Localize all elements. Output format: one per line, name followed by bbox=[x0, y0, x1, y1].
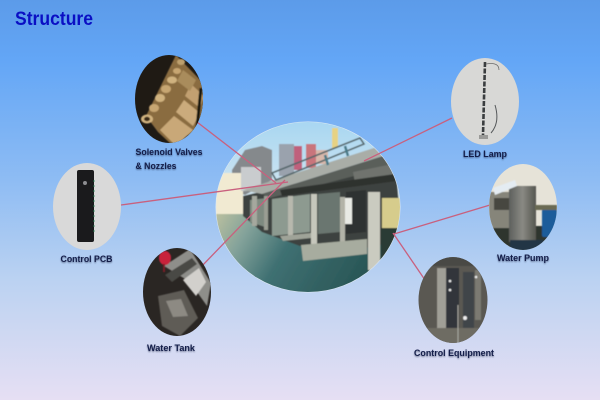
label: solenoid valves: Solenoid Valves bbox=[136, 147, 202, 158]
photo: solenoid valves bbox=[135, 55, 205, 146]
title: Structure bbox=[15, 9, 93, 30]
node: water tank bbox=[143, 248, 211, 354]
label: control PCB: Control PCB bbox=[60, 254, 113, 265]
photo: water pump bbox=[489, 164, 557, 252]
label: control equipment: Control Equipment bbox=[414, 348, 495, 359]
photo: control PCB bbox=[53, 163, 121, 250]
label: nozzles: & Nozzles bbox=[136, 161, 176, 172]
photo: water tank bbox=[143, 248, 211, 336]
label: LED lamp: LED Lamp bbox=[463, 149, 507, 160]
central photo: bridge over river bbox=[216, 122, 400, 292]
node: solenoid valves and nozzles bbox=[135, 55, 205, 172]
node: LED lamp bbox=[451, 58, 519, 160]
node: control equipment bbox=[414, 257, 495, 359]
node: water pump bbox=[489, 164, 557, 264]
photo: control equipment bbox=[418, 257, 489, 344]
connector lines bbox=[121, 118, 490, 280]
label: water tank: Water Tank bbox=[147, 343, 196, 354]
label: water pump: Water Pump bbox=[497, 253, 549, 264]
photo: LED lamp bbox=[451, 58, 519, 145]
node: control PCB bbox=[53, 163, 121, 265]
